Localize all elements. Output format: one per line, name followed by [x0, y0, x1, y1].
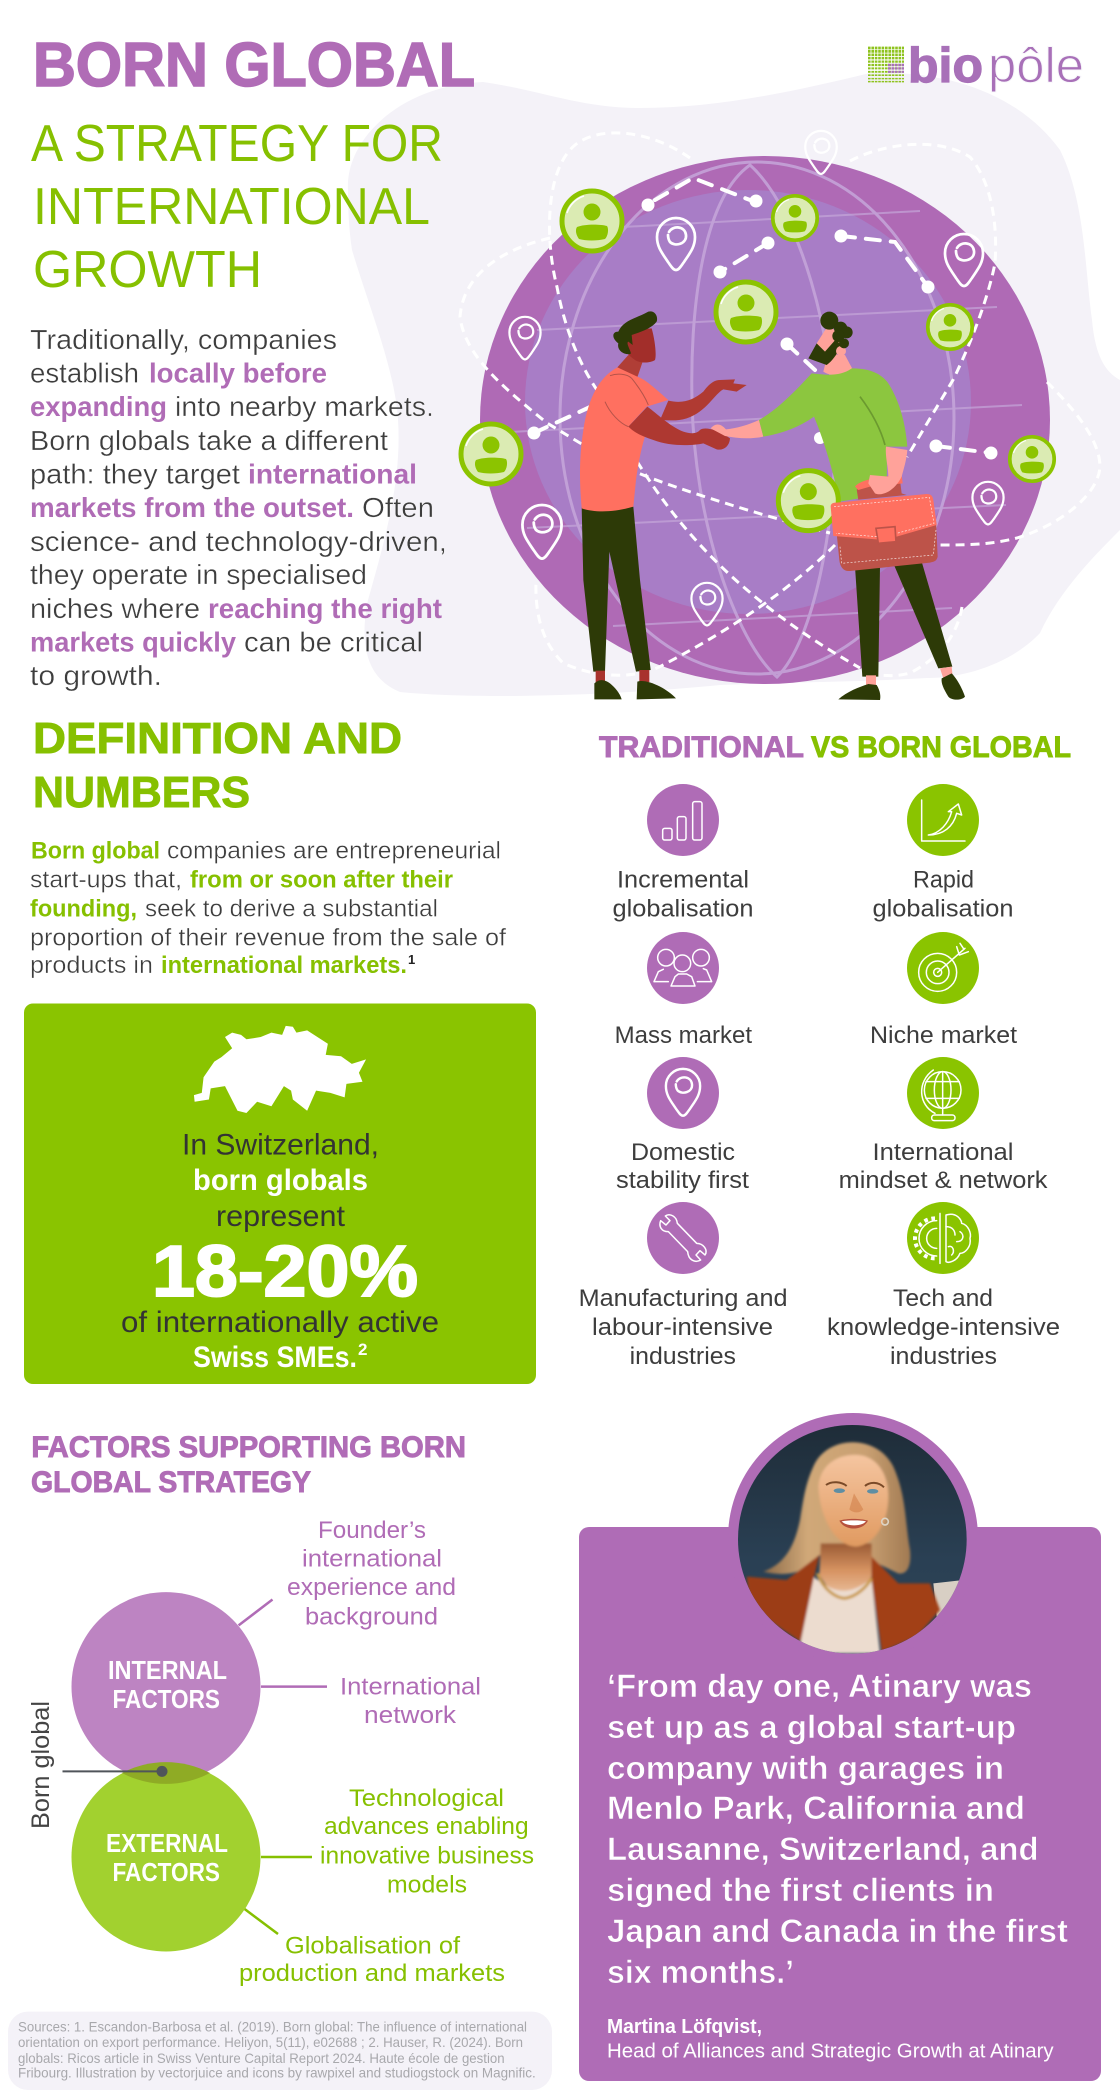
globe outer disc	[480, 156, 1050, 684]
label: international mindset: mindset & network	[839, 1167, 1049, 1194]
icon: target	[907, 932, 979, 1004]
intro text	[30, 324, 447, 691]
label: international network: network	[364, 1702, 457, 1729]
intro text: science- and technology-driven,	[30, 526, 447, 557]
quote text: Japan and Canada in the first	[607, 1913, 1068, 1949]
circle: external factors	[72, 1762, 260, 1952]
intro text: locally before	[149, 358, 327, 388]
intro text: establish	[30, 358, 139, 388]
heading: definition and numbers: DEFINITION AND	[33, 714, 402, 763]
label: founder experience: background	[305, 1604, 438, 1630]
icon: map of Switzerland	[194, 1026, 366, 1113]
logo: biopole: bio	[908, 39, 983, 93]
heading: factors: FACTORS SUPPORTING BORN	[31, 1431, 466, 1464]
comparison: born global column	[827, 784, 1060, 1370]
statistic text: represent	[216, 1200, 346, 1233]
label: rapid globalisation: Rapid	[913, 866, 974, 894]
heading: factors	[31, 1431, 466, 1499]
label: tech and knowledge: industries	[890, 1343, 997, 1370]
definition text: founding,	[30, 896, 137, 922]
definition text: companies are entrepreneurial	[167, 838, 501, 864]
statistic text: of internationally active	[121, 1306, 439, 1339]
label: international mindset	[839, 1139, 1049, 1194]
subtitle: GROWTH	[33, 241, 262, 299]
statistic text: 2	[358, 1340, 367, 1359]
label: domestic stability first: stability first	[616, 1167, 749, 1194]
illustration: globe and handshake	[460, 131, 1100, 700]
label: domestic stability first	[616, 1139, 749, 1194]
connector lines	[239, 1600, 327, 1934]
intro text: to growth.	[30, 660, 162, 691]
icon: growth chart	[907, 784, 979, 856]
label: international network: International	[340, 1674, 481, 1701]
born global marker: Born global	[27, 1701, 55, 1829]
background blob	[348, 73, 1120, 696]
man left	[580, 311, 747, 699]
sources: Fribourg. Illustration by vectorjuice and icons by rawpixel and studiogstock on Magnific.	[18, 2065, 536, 2081]
label: founder experience: Founder’s	[318, 1517, 426, 1544]
label: rapid globalisation: globalisation	[872, 896, 1014, 922]
label: incremental globalisation	[612, 866, 754, 922]
circle: internal factors: INTERNAL	[108, 1655, 227, 1685]
label: tech and knowledge	[827, 1285, 1060, 1370]
circle: external factors: EXTERNAL	[106, 1828, 228, 1858]
label: founder experience	[287, 1517, 456, 1630]
quote text: signed the first clients in	[607, 1872, 994, 1908]
icon: globe	[907, 1057, 979, 1129]
portrait photo	[738, 1425, 967, 1654]
heading: definition and numbers: NUMBERS	[33, 768, 250, 817]
heading: traditional vs born global: TRADITIONAL	[599, 731, 804, 764]
label: tech and knowledge: knowledge-intensive	[827, 1314, 1060, 1341]
panel: Swiss statistic	[24, 1004, 536, 1384]
intro text: they operate in specialised	[30, 559, 367, 590]
quote text: Menlo Park, California and	[607, 1790, 1025, 1826]
icon: pin	[647, 1057, 719, 1129]
heading: traditional vs born global	[599, 731, 1071, 764]
sources: orientation on export performance. Heliyon, 5(11), e02688 ; 2. Hauser, R. (2024). Born	[18, 2034, 523, 2050]
label: technological advances: advances enabling	[324, 1813, 529, 1840]
globe grid	[510, 162, 1022, 677]
definition text	[30, 838, 506, 979]
panel: quote	[579, 1410, 1101, 2081]
icon: gear and brain	[907, 1202, 979, 1274]
definition text: products in	[30, 952, 153, 979]
sources: Sources: 1. Escandon-Barbosa et al. (2019). Born global: The influence of international	[18, 2019, 527, 2035]
intro text: Born globals take a different	[30, 425, 388, 456]
intro text: niches where	[30, 593, 200, 624]
man right	[711, 312, 965, 700]
label: globalisation: production and markets	[239, 1960, 505, 1987]
intro text: can be critical	[244, 626, 423, 658]
quote text: company with garages in	[607, 1750, 1004, 1786]
label: technological advances: innovative business	[320, 1842, 534, 1869]
briefcase	[831, 494, 938, 571]
quote text: Lausanne, Switzerland, and	[607, 1831, 1039, 1867]
statistic text: Swiss SMEs.	[193, 1341, 357, 1374]
subtitle: A STRATEGY FOR	[31, 115, 443, 173]
quote attribution: Martina Löfqvist,	[607, 2016, 762, 2038]
heading: definition and numbers	[33, 714, 402, 817]
network links	[528, 178, 998, 460]
intro text: markets from the outset.	[30, 492, 354, 523]
label: mass market: Mass market	[615, 1022, 752, 1049]
label: technological advances	[320, 1785, 534, 1898]
definition text: proportion of their revenue from the sale of	[30, 924, 506, 952]
statistic text: 18-20%	[152, 1232, 418, 1312]
dashed orbits	[460, 133, 1100, 676]
label: founder experience: experience and	[287, 1574, 456, 1601]
intro text: Often	[362, 492, 434, 523]
statistic text: born globals	[193, 1164, 368, 1197]
circle: internal factors	[72, 1592, 260, 1781]
intro text: international	[248, 458, 417, 490]
label: domestic stability first: Domestic	[631, 1139, 735, 1166]
icon: people	[647, 932, 719, 1004]
label: incremental globalisation: Incremental	[617, 866, 749, 894]
label: international mindset: International	[872, 1139, 1014, 1166]
logo: biopole: pôle	[988, 39, 1084, 93]
born global marker	[27, 1701, 168, 1829]
label: globalisation: Globalisation of	[285, 1933, 460, 1960]
sources: globals: Ricos article in Swiss Venture Capital Report 2024. Haute école de gestion	[18, 2050, 505, 2066]
definition text: international markets.	[161, 952, 407, 979]
globe inner disc	[525, 190, 971, 614]
sources	[8, 2012, 552, 2090]
subtitle	[31, 115, 443, 299]
definition text: from or soon after their	[190, 866, 453, 894]
label: international network	[340, 1674, 481, 1729]
label: tech and knowledge: Tech and	[893, 1285, 993, 1312]
intro text: path: they target	[30, 458, 240, 490]
label: founder experience: international	[302, 1546, 442, 1572]
circle: internal factors: FACTORS	[112, 1684, 220, 1714]
quote attribution: Head of Alliances and Strategic Growth at Atinary	[607, 2041, 1054, 2063]
label: incremental globalisation: globalisation	[612, 896, 754, 922]
label: rapid globalisation	[872, 866, 1014, 922]
diagram: internal and external factors	[27, 1517, 534, 1987]
label: niche market: Niche market	[870, 1022, 1017, 1049]
label: manufacturing	[579, 1285, 788, 1370]
statistic text: In Switzerland,	[182, 1128, 379, 1162]
subtitle: INTERNATIONAL	[33, 178, 430, 236]
definition text: Born global	[31, 838, 160, 864]
label: technological advances: models	[387, 1871, 467, 1898]
icon: wrench	[647, 1202, 719, 1274]
intro text: expanding	[30, 391, 167, 422]
comparison: traditional column	[579, 784, 788, 1370]
icon: bars	[647, 784, 719, 856]
statistic text	[121, 1128, 439, 1374]
intro text: into nearby markets.	[175, 391, 434, 422]
quote text	[607, 1668, 1068, 1990]
label: manufacturing: Manufacturing and	[579, 1285, 788, 1312]
intro text: Traditionally, companies	[30, 324, 337, 355]
people avatars	[461, 191, 1054, 484]
heading: traditional vs born global: VS BORN GLOBAL	[811, 731, 1071, 764]
definition text: 1	[408, 952, 415, 967]
quote attribution	[607, 2016, 1054, 2063]
location pins	[509, 131, 1004, 625]
label: manufacturing: industries	[630, 1343, 736, 1370]
quote text: set up as a global start-up	[607, 1709, 1016, 1745]
logo: biopole	[868, 39, 1084, 93]
intro text: reaching the right	[208, 593, 442, 624]
quote text: ‘From day one, Atinary was	[607, 1668, 1032, 1704]
heading: factors: GLOBAL STRATEGY	[31, 1466, 311, 1499]
intro text: markets quickly	[30, 626, 237, 658]
definition text: start-ups that,	[30, 866, 182, 894]
circle: external factors: FACTORS	[112, 1857, 220, 1887]
quote text: six months.’	[607, 1954, 794, 1990]
label: manufacturing: labour-intensive	[592, 1314, 773, 1341]
title: BORN GLOBAL	[33, 31, 475, 100]
definition text: seek to derive a substantial	[145, 896, 438, 922]
label: technological advances: Technological	[349, 1785, 504, 1812]
label: globalisation	[239, 1933, 505, 1987]
